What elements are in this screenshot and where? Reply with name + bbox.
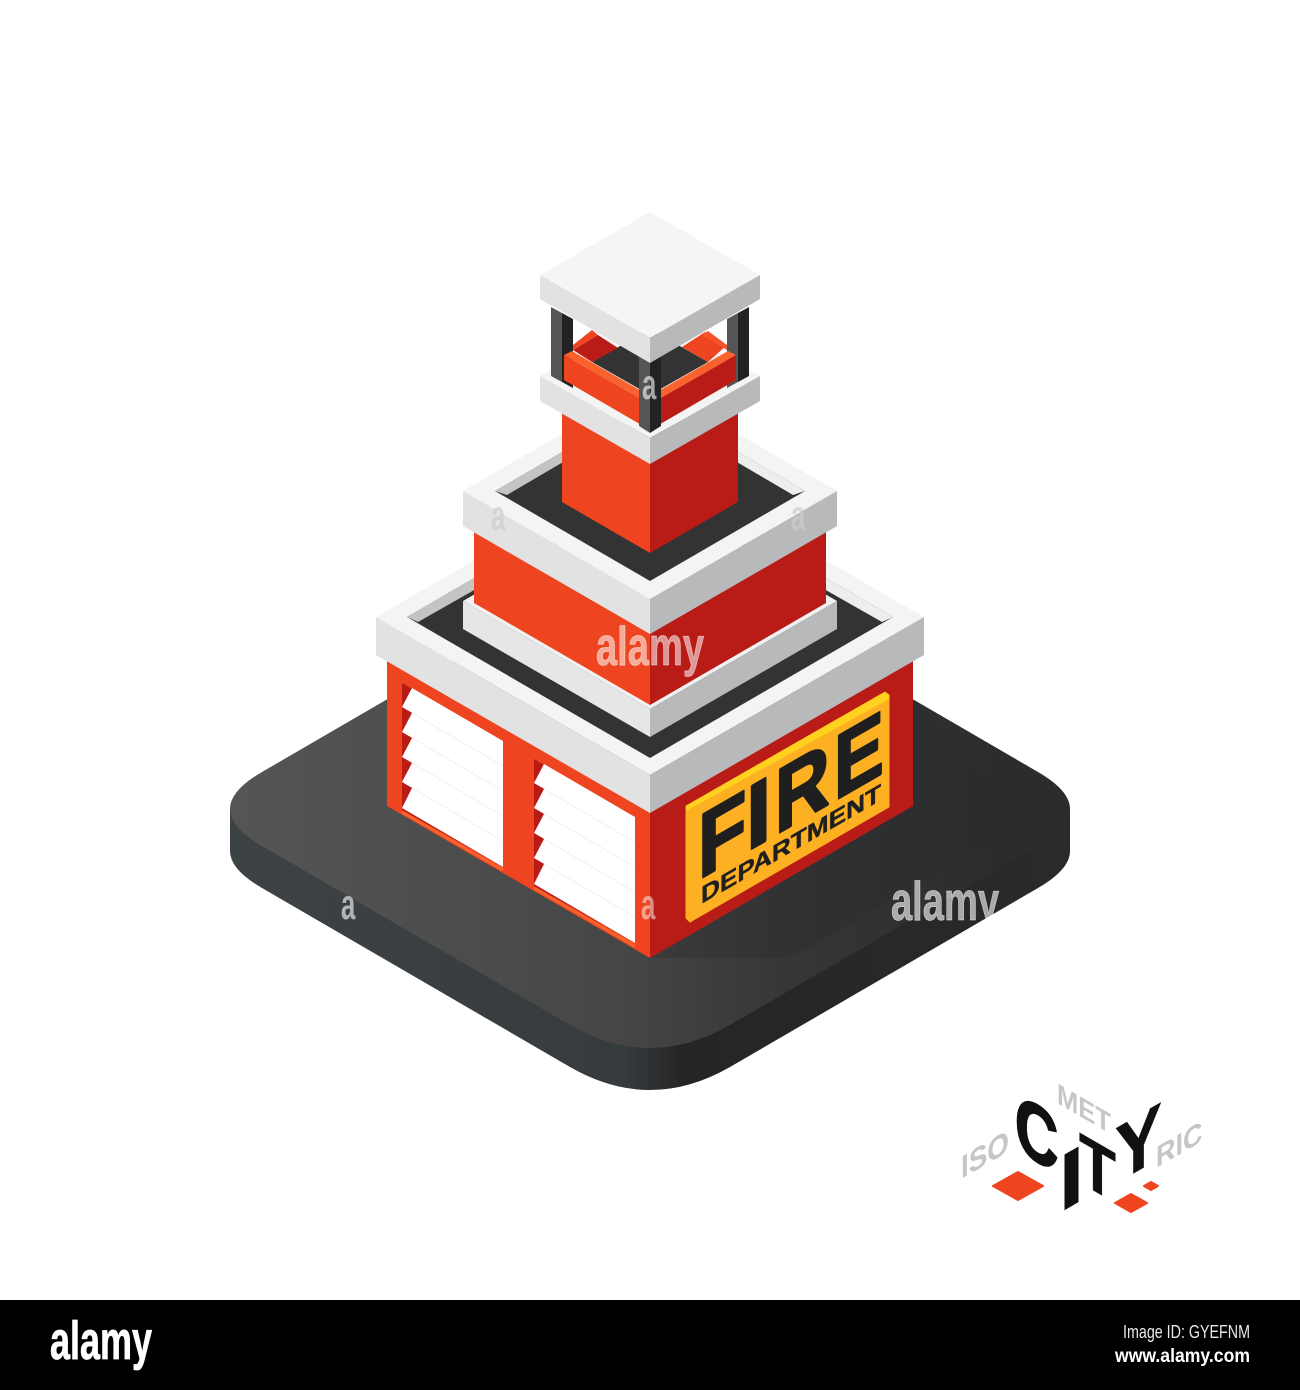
ground floor walls [387, 650, 913, 958]
logo letter: T: T [1079, 1118, 1116, 1220]
footer alamy logo: alamy [50, 1311, 152, 1371]
watermarks: a [642, 360, 657, 409]
watermarks: a [491, 491, 506, 540]
sign word FIRE: E [834, 690, 884, 821]
watermarks: a [791, 491, 806, 540]
sign word FIRE: F [698, 770, 746, 900]
sign word DEPARTMENT: DEPARTMENT [701, 780, 881, 910]
sign word FIRE: R [775, 721, 830, 854]
rear lookout pillars [551, 307, 749, 388]
logo letter: Y: Y [1115, 1085, 1162, 1202]
second floor lower slab [463, 493, 837, 737]
second floor walls [474, 520, 826, 705]
logo letter: C: C [1015, 1075, 1058, 1191]
isometric platform base [230, 570, 1070, 1090]
sign word FIRE [698, 690, 884, 900]
lookout railing [564, 329, 736, 430]
logo word: RIC: RIC [1156, 1115, 1202, 1175]
tower top roof [540, 212, 760, 363]
logo letter: I: I [1058, 1125, 1085, 1231]
watermarks: a [341, 880, 356, 929]
fire department sign [686, 690, 889, 922]
logo word: MET: MET [1057, 1078, 1111, 1141]
footer bar [0, 1300, 1300, 1390]
watermarks [341, 360, 999, 932]
watermarks: alamy [891, 870, 999, 932]
image id: Image ID: GYEFNM [1123, 1322, 1250, 1342]
tower lookout floor slab [540, 314, 760, 464]
tower walls [562, 410, 738, 553]
second floor roof [463, 383, 837, 634]
front lookout pillar [639, 355, 661, 433]
garage door right [534, 759, 635, 946]
ground floor roof [376, 459, 924, 813]
watermarks: a [641, 880, 656, 929]
sign word FIRE: I [746, 755, 771, 871]
garage door left [402, 683, 503, 870]
watermarks: alamy [596, 615, 704, 677]
logo word: ISO: ISO [961, 1122, 1009, 1186]
logo diamonds [993, 1172, 1158, 1212]
fire station building [376, 212, 924, 958]
website: www.alamy.com [1114, 1346, 1250, 1367]
isometric city logo [961, 1075, 1202, 1231]
